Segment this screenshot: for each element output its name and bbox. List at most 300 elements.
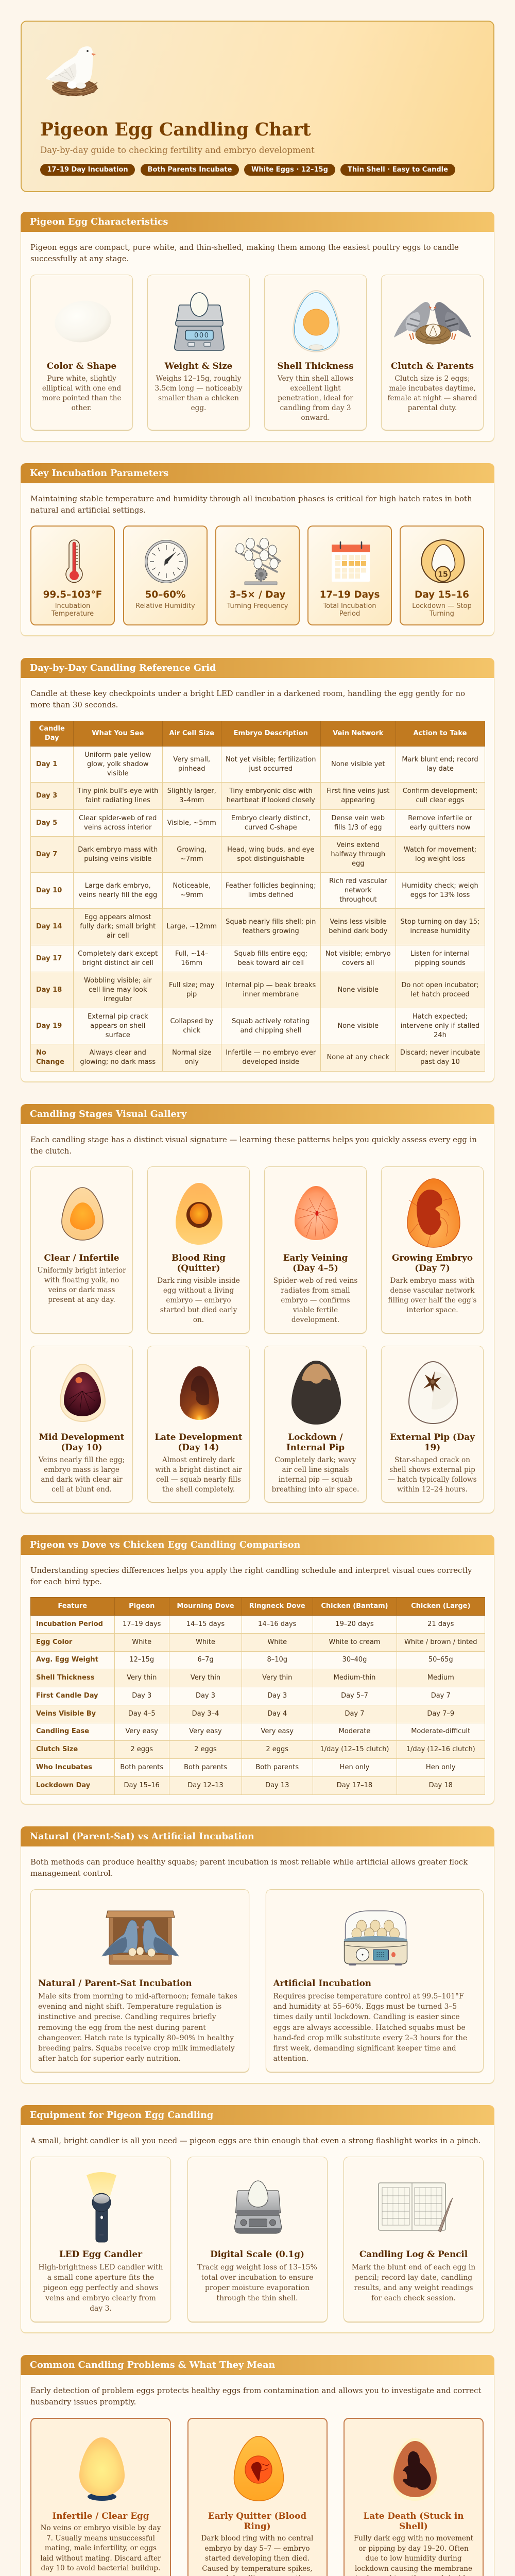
table: daily candling reference: spot distinguishable: [237, 855, 304, 862]
table: daily candling reference: Infertile — no embryo ever: [226, 1049, 316, 1057]
intro text: Candle at these key checkpoints under a bright LED candler in a darkened room, handling the egg gently for no: [30, 689, 465, 698]
card: late development: [147, 1346, 250, 1502]
table: species comparison: Both parents: [255, 1763, 299, 1771]
table: daily candling reference: Squab fills entire egg;: [234, 950, 307, 957]
card text: — hatch typically follows: [388, 1476, 477, 1484]
table: daily candling reference: 16mm: [181, 959, 202, 967]
icon: hygrometer dial: [145, 540, 188, 583]
table: daily candling reference: Veins less visible: [330, 918, 386, 926]
card: weight and size: [147, 275, 250, 430]
table: daily candling reference: Dark embryo mass with: [78, 846, 158, 853]
table: daily candling reference: Squab nearly fills shell; pin: [226, 918, 316, 926]
table: daily candling reference: Feather follicles beginning;: [226, 882, 316, 889]
card text: breeding pairs. Squabs receive crop milk immediately: [38, 2044, 235, 2053]
problem card: infertile: [30, 2418, 171, 2576]
table: species comparison: Feature: [58, 1602, 87, 1610]
problem card: early quitter: [187, 2418, 328, 2576]
card text: veins and embryo clearly from: [45, 2294, 156, 2302]
card text: [277, 374, 353, 421]
card text: breathing into air space.: [272, 1485, 359, 1493]
card text: laid without mating. Discard after: [40, 2554, 161, 2563]
card text: [387, 374, 477, 412]
card heading: 19): [424, 1442, 440, 1452]
card text: with floating yolk, no: [44, 1276, 119, 1284]
title: Pigeon Egg Candling Chart: [40, 120, 311, 140]
pill: [244, 164, 335, 176]
card text: dense vascular network: [390, 1286, 475, 1294]
stat label: Period: [339, 610, 360, 617]
card text: the shell completely.: [162, 1485, 235, 1493]
table: species comparison: Day 7: [345, 1709, 365, 1718]
table: species comparison: Egg Color: [36, 1638, 72, 1646]
table: daily candling reference: Watch for movement;: [404, 846, 476, 853]
table: species comparison: Shell Thickness: [36, 1673, 94, 1682]
table: daily candling reference: Noticeable,: [173, 882, 211, 889]
table: daily candling reference: Clear spider-web of red: [79, 814, 157, 822]
card text: Star-shaped crack on: [394, 1456, 470, 1464]
table: daily candling reference: Internal pip — beak breaks: [226, 981, 316, 989]
table: daily candling reference: None visible: [337, 1022, 379, 1029]
table: species comparison: First Candle Day: [36, 1692, 98, 1699]
stat value: 3–5× / Day: [230, 589, 285, 600]
table: daily candling reference: Vein Network: [333, 730, 383, 737]
card text: [38, 1991, 249, 2064]
table: species comparison: Day 3: [267, 1692, 287, 1699]
table: daily candling reference: Large dark embryo,: [85, 882, 151, 889]
table: daily candling reference: Day 18: [36, 986, 62, 993]
table: species comparison: Very easy: [126, 1727, 158, 1735]
card heading: Shell): [399, 2521, 428, 2531]
card heading: Mid Development: [39, 1432, 124, 1442]
table: daily candling reference: veins across interior: [84, 823, 151, 832]
table: daily candling reference: air cell: [107, 932, 129, 940]
table: species comparison: Day 7–9: [427, 1709, 454, 1718]
stat label: Lockdown — Stop: [412, 602, 472, 610]
table: daily candling reference: Hatch expected;: [413, 1013, 468, 1020]
table: daily candling reference: Day 3: [36, 792, 57, 800]
card text: internal pip — squab: [279, 1476, 352, 1484]
card heading: Ring): [244, 2521, 271, 2531]
table: daily candling reference: Confirm development;: [403, 787, 477, 795]
table: species comparison: 2 eggs: [130, 1745, 153, 1753]
card text: [37, 1266, 126, 1303]
table: species comparison: White to cream: [329, 1638, 380, 1646]
table: species comparison: Incubation Period: [36, 1620, 103, 1628]
card heading: [344, 2511, 484, 2531]
table: daily candling reference: Growing,: [177, 846, 207, 853]
card text: air cell line signals: [282, 1465, 349, 1473]
card heading: Early Quitter (Blood: [208, 2511, 306, 2521]
heading: [21, 1826, 494, 1846]
panel: pigeon egg characteristics: [21, 212, 494, 442]
table: daily candling reference: chick: [183, 1026, 200, 1035]
card text: Dark embryo mass with: [390, 1277, 474, 1285]
table: species comparison: [30, 1597, 485, 1795]
pill: 17–19 Day Incubation: [47, 166, 128, 174]
heading: [21, 463, 494, 483]
table: daily candling reference: pulsing veins visible: [84, 855, 151, 862]
card text: Dark blood ring with no central: [201, 2534, 313, 2543]
card: blood ring: [147, 1166, 250, 1333]
table: daily candling reference: bright distinct air cell: [82, 959, 153, 967]
card heading: Color & Shape: [47, 361, 116, 371]
table: daily candling reference: Day 19: [36, 1022, 62, 1029]
card heading: [147, 1432, 250, 1452]
icon: pigeon pair with nest: [394, 302, 471, 344]
icon: calendar: [332, 541, 370, 582]
heading: Pigeon vs Dove vs Chicken Egg Candling Comparison: [30, 1539, 300, 1550]
table: species comparison: Chicken (Large): [411, 1602, 470, 1610]
card text: [38, 1456, 125, 1493]
icon: cracked egg: [381, 1346, 484, 1432]
card: growing embryo: [381, 1166, 484, 1333]
table: species comparison: Day 15–16: [124, 1782, 160, 1789]
card text: proper moisture evaporation: [205, 2284, 310, 2292]
card text: interior space.: [406, 1306, 458, 1314]
card text: male incubates daytime,: [389, 384, 476, 393]
card text: veins or dark mass: [48, 1286, 115, 1294]
card heading: Weight & Size: [165, 361, 232, 371]
table: daily candling reference: Egg appears almost: [84, 913, 151, 921]
intro text: [30, 689, 465, 709]
table: species comparison: Moderate-difficult: [411, 1727, 470, 1735]
table: daily candling reference: throughout: [339, 895, 376, 904]
card text: smaller than a chicken: [158, 394, 239, 402]
heading: Candling Stages Visual Gallery: [30, 1109, 186, 1120]
card heading: Late Development: [154, 1432, 243, 1442]
stat value: 50–60%: [145, 589, 185, 600]
table: daily candling reference: Day 14: [36, 923, 62, 930]
table: daily candling reference: Head, wing buds, and eye: [227, 846, 314, 853]
card text: 7. Usually means unsuccessful: [46, 2534, 155, 2543]
card heading: Artificial Incubation: [273, 1978, 371, 1988]
table: daily candling reference: appearing: [341, 796, 375, 804]
table: species comparison: Very thin: [191, 1673, 220, 1682]
intro text: [30, 2385, 481, 2409]
table: daily candling reference: lay date: [426, 765, 454, 773]
card heading: [264, 1432, 367, 1452]
table: daily candling reference: just occurred: [249, 765, 293, 773]
table: daily candling reference: Do not open incubator;: [401, 981, 479, 989]
table: daily candling reference: pinhead: [178, 765, 205, 773]
card: early veining: [264, 1166, 367, 1333]
problem card: late death: [344, 2418, 484, 2576]
card text: parental duty.: [408, 404, 457, 412]
table: species comparison: Candling Ease: [36, 1727, 89, 1735]
card text: cell — squab nearly fills: [156, 1476, 241, 1484]
card heading: Natural / Parent-Sat Incubation: [38, 1978, 192, 1988]
table: species comparison: Day 3: [196, 1692, 215, 1699]
icon: white egg: [63, 308, 111, 342]
intro text: [30, 243, 459, 263]
table: daily candling reference: Very small,: [173, 755, 210, 764]
card heading: [283, 1252, 348, 1273]
card heading: Shell Thickness: [277, 361, 354, 371]
stat label: Turning Frequency: [227, 602, 288, 610]
icon: egg turner: [235, 538, 281, 585]
card heading: Blood Ring: [171, 1252, 226, 1263]
table: daily candling reference: Rich red vascular: [329, 877, 387, 885]
table: species comparison: Day 18: [429, 1782, 453, 1789]
table: species comparison: Chicken (Bantam): [321, 1602, 388, 1610]
icon: late-stage egg: [147, 1346, 250, 1432]
table: daily candling reference: Air Cell Size: [169, 730, 214, 737]
pill: [141, 164, 239, 176]
card text: Clutch size is 2 eggs;: [394, 374, 470, 382]
card text: other.: [72, 404, 92, 412]
card heading: (Day 7): [415, 1263, 450, 1273]
card: mid development: [30, 1346, 133, 1502]
card heading: [171, 1252, 226, 1273]
table: species comparison: 1/day (12–16 clutch): [406, 1745, 475, 1753]
card text: [344, 2262, 484, 2303]
icon: embryo egg: [407, 1178, 460, 1248]
card heading: [381, 1432, 484, 1452]
card text: pencil; record lay date, candling: [355, 2274, 472, 2282]
icon: egg cross-section: [293, 290, 340, 352]
icon: clear egg: [61, 1187, 104, 1241]
card: clutch and parents: [381, 275, 484, 430]
card text: pigeon egg perfectly and shows: [43, 2284, 159, 2292]
table: daily candling reference: veins nearly fill the egg: [78, 891, 157, 899]
panel: common candling problems: [21, 2355, 494, 2576]
card text: excellent light: [290, 384, 341, 393]
table: daily candling reference: Day 17: [36, 954, 62, 962]
table: daily candling reference: developed inside: [242, 1058, 299, 1066]
table: daily candling reference: Discard; never incubate: [400, 1049, 480, 1057]
card text: [155, 374, 242, 412]
table: species comparison: 14–15 days: [186, 1620, 225, 1628]
card text: [388, 1277, 476, 1314]
card: color and shape: [30, 275, 133, 430]
heading: Common Candling Problems & What They Mean: [30, 2360, 275, 2370]
card: shell thickness: [264, 275, 367, 430]
card text: penetration, ideal for: [278, 394, 353, 402]
card text: eggs are always accessible. Hatched squabs must be: [273, 2024, 466, 2032]
table: daily candling reference: fully dark; small bright: [80, 923, 156, 930]
card text: with a bright distinct air: [155, 1465, 242, 1473]
table: daily candling reference: eggs for 13% loss: [410, 891, 470, 899]
table: daily candling reference: limbs defined: [248, 891, 294, 899]
card text: results, and any weight readings: [354, 2284, 473, 2292]
card heading: Infertile / Clear Egg: [52, 2511, 149, 2521]
card text: Uniformly bright interior: [37, 1266, 126, 1275]
panel: equipment for candling: [21, 2105, 494, 2333]
card text: Male sits from morning to mid-afternoon; female takes: [38, 1992, 237, 2001]
table: species comparison: 19–20 days: [335, 1620, 374, 1628]
intro text: Early detection of problem eggs protects healthy eggs from contamination and allows you to investigate and correct: [30, 2386, 481, 2395]
card text: embryo — confirms: [281, 1296, 350, 1304]
card text: Caused by temperature spikes,: [202, 2565, 313, 2573]
table: daily candling reference: [30, 721, 485, 1072]
table: daily candling reference: cell line may look: [89, 986, 147, 993]
table: daily candling reference: Stop turning on day 15;: [401, 918, 479, 926]
table: daily candling reference: let hatch proceed: [410, 990, 470, 998]
card text: hand-fed crop milk substitute every 2–3 hours for the: [273, 2034, 467, 2042]
card text: removing the egg from the nest during parent: [38, 2024, 206, 2032]
card heading: (Day 4–5): [293, 1263, 338, 1273]
table: daily candling reference: Uniform pale yellow: [84, 751, 151, 758]
table: species comparison: Ringneck Dove: [249, 1602, 305, 1610]
intro text: [30, 495, 472, 515]
table: daily candling reference: network: [345, 886, 372, 894]
card heading: Growing Embryo: [392, 1252, 473, 1263]
table: daily candling reference: Change: [36, 1058, 64, 1066]
table: daily candling reference: behind dark body: [329, 927, 387, 935]
panel: day-by-day candling reference grid: [21, 658, 494, 1083]
table: daily candling reference: glowing; no dark mass: [80, 1058, 156, 1066]
table: daily candling reference: pipping sounds: [415, 959, 466, 967]
table: daily candling reference: faint radiating lines: [85, 796, 150, 804]
table: species comparison: Who Incubates: [36, 1763, 92, 1771]
table: species comparison: White / brown / tinted: [404, 1638, 477, 1646]
card: LED candler: [30, 2157, 171, 2322]
intro text: Each candling stage has a distinct visual signature — learning these patterns helps you quickly assess every egg in: [30, 1136, 477, 1144]
pill: Both Parents Incubate: [148, 166, 232, 174]
card text: [273, 1277, 357, 1324]
table: species comparison: Day 5–7: [341, 1692, 368, 1699]
panel: pigeon vs dove vs chicken comparison: [21, 1535, 494, 1804]
table: daily candling reference: Day 1: [36, 760, 57, 768]
stat card: humidity: [123, 526, 208, 625]
table: daily candling reference: Squab actively rotating: [232, 1017, 310, 1025]
intro text: more than 30 seconds.: [30, 701, 118, 709]
card heading: Clutch & Parents: [391, 361, 474, 371]
card text: [344, 2534, 484, 2576]
table: species comparison: Moderate: [339, 1727, 370, 1735]
illustration: white pigeon on nest: [46, 46, 98, 96]
icon: lockdown egg badge: [421, 539, 465, 583]
stat value: 99.5–103°F: [43, 589, 102, 600]
table: species comparison: Day 7: [431, 1692, 451, 1699]
table: daily candling reference: External pip crack: [88, 1013, 148, 1020]
card text: Veins nearly fill the egg;: [39, 1456, 125, 1464]
card heading: LED Egg Candler: [59, 2249, 142, 2259]
table: daily candling reference: ~7mm: [180, 855, 203, 862]
card: natural incubation: [30, 1889, 249, 2072]
table: daily candling reference: only: [184, 1058, 199, 1066]
stat label: Relative Humidity: [135, 602, 195, 610]
card text: [187, 2262, 328, 2303]
table: daily candling reference: irregular: [104, 995, 132, 1003]
card: artificial incubation: [266, 1889, 484, 2072]
table: daily candling reference: appears on shell: [90, 1022, 145, 1029]
table: daily candling reference: fills 1/3 of egg: [334, 823, 382, 832]
card text: Dark ring visible inside: [157, 1277, 240, 1285]
card text: a small cone aperture fits the: [47, 2274, 154, 2282]
table: species comparison: 2 eggs: [194, 1745, 217, 1753]
stat label: [323, 602, 376, 617]
table: daily candling reference: Day: [45, 734, 59, 742]
heading: Pigeon Egg Characteristics: [30, 216, 168, 227]
card text: cell at blunt end.: [52, 1485, 112, 1493]
intro text: the clutch.: [30, 1147, 72, 1156]
card text: Spider-web of red veins: [273, 1277, 357, 1285]
table: species comparison: Very easy: [189, 1727, 222, 1735]
table: daily candling reference: intervene only if stalled: [401, 1022, 479, 1029]
intro text: Understanding species differences helps you apply the right candling schedule and interpret visual cues correctly: [30, 1566, 472, 1575]
table: daily candling reference: halfway through: [331, 850, 385, 858]
card text: Pure white, slightly: [47, 374, 116, 382]
intro text: husbandry issues promptly.: [30, 2398, 136, 2406]
table: daily candling reference: Completely dark except: [78, 950, 158, 957]
table: species comparison: Pigeon: [129, 1602, 154, 1610]
table: species comparison: Day 12–13: [187, 1782, 224, 1789]
icon: digital scale: [187, 2157, 328, 2247]
intro text: successfully at any stage.: [30, 255, 129, 263]
card heading: (Day 10): [61, 1442, 102, 1452]
heading: [21, 212, 494, 232]
table: daily candling reference: inner membrane: [243, 990, 299, 998]
table: daily candling reference: 24h: [434, 1031, 447, 1039]
card text: development.: [291, 1316, 339, 1324]
card text: attention.: [273, 2055, 308, 2063]
card text: evening and night shift. Temperature regulation is: [38, 2003, 221, 2011]
icon: mid-stage egg: [60, 1364, 106, 1422]
card: digital scale: [187, 2157, 328, 2322]
intro text: for each bird type.: [30, 1578, 102, 1586]
card heading: [392, 1252, 473, 1273]
card text: due to low humidity during: [365, 2554, 462, 2563]
card: clear infertile: [30, 1166, 133, 1333]
table: daily candling reference: What You See: [92, 730, 144, 737]
icon: blood ring egg: [187, 2418, 328, 2508]
card heading: Lockdown /: [288, 1432, 343, 1442]
stat label: Temperature: [52, 610, 94, 617]
icon: veined egg: [295, 1186, 338, 1240]
card text: [30, 2262, 171, 2314]
icon: late death egg: [344, 2418, 484, 2508]
table: daily candling reference: egg: [352, 859, 365, 868]
pill: [340, 164, 455, 176]
table: daily candling reference: Not yet visible; fertilization: [226, 755, 316, 764]
card text: Weighs 12–15g, roughly: [156, 374, 241, 382]
stat card: total period: [307, 526, 392, 625]
card text: and humidity at 55–60%. Eggs must be turned 3–5: [273, 2003, 457, 2011]
card text: [42, 374, 122, 412]
intro text: A small, bright candler is all you need — pigeon eggs are thin enough that even a strong flashlight works in a pinch.: [30, 2137, 480, 2145]
table: species comparison: Medium-thin: [334, 1673, 375, 1682]
card text: mating, male infertility, or eggs: [45, 2544, 157, 2552]
table: daily candling reference: First fine veins just: [327, 787, 389, 795]
table: daily candling reference: None at any check: [327, 1054, 389, 1061]
table: species comparison: 1/day (12–15 clutch): [320, 1745, 389, 1753]
table: daily candling reference: Tiny pink bull's-eye with: [77, 787, 158, 795]
stat label: Incubation: [55, 602, 90, 610]
hero banner: [21, 21, 494, 192]
card text: [157, 1277, 240, 1324]
table: daily candling reference: Normal size: [172, 1049, 211, 1057]
table: daily candling reference: Day 5: [36, 819, 57, 826]
illustration: egg incubator: [266, 1889, 483, 1977]
card heading: (Day 14): [178, 1442, 219, 1452]
intro text: [30, 1857, 468, 1880]
card text: more pointed than the: [42, 394, 122, 402]
icon: flashlight candler: [30, 2157, 171, 2247]
card heading: Clear / Infertile: [44, 1252, 119, 1263]
panel: candling stages visual gallery: [21, 1104, 494, 1514]
table: daily candling reference: Slightly larger,: [167, 787, 216, 795]
table: species comparison: Mourning Dove: [177, 1602, 234, 1610]
card text: [30, 2523, 171, 2573]
card text: [187, 2534, 328, 2576]
table: daily candling reference: pip: [186, 990, 197, 998]
card text: started developing then died.: [205, 2554, 310, 2563]
stat card: lockdown: [400, 526, 484, 625]
heading: [21, 1104, 494, 1124]
table: daily candling reference: None visible yet: [331, 760, 385, 768]
card text: for each check session.: [371, 2294, 456, 2302]
